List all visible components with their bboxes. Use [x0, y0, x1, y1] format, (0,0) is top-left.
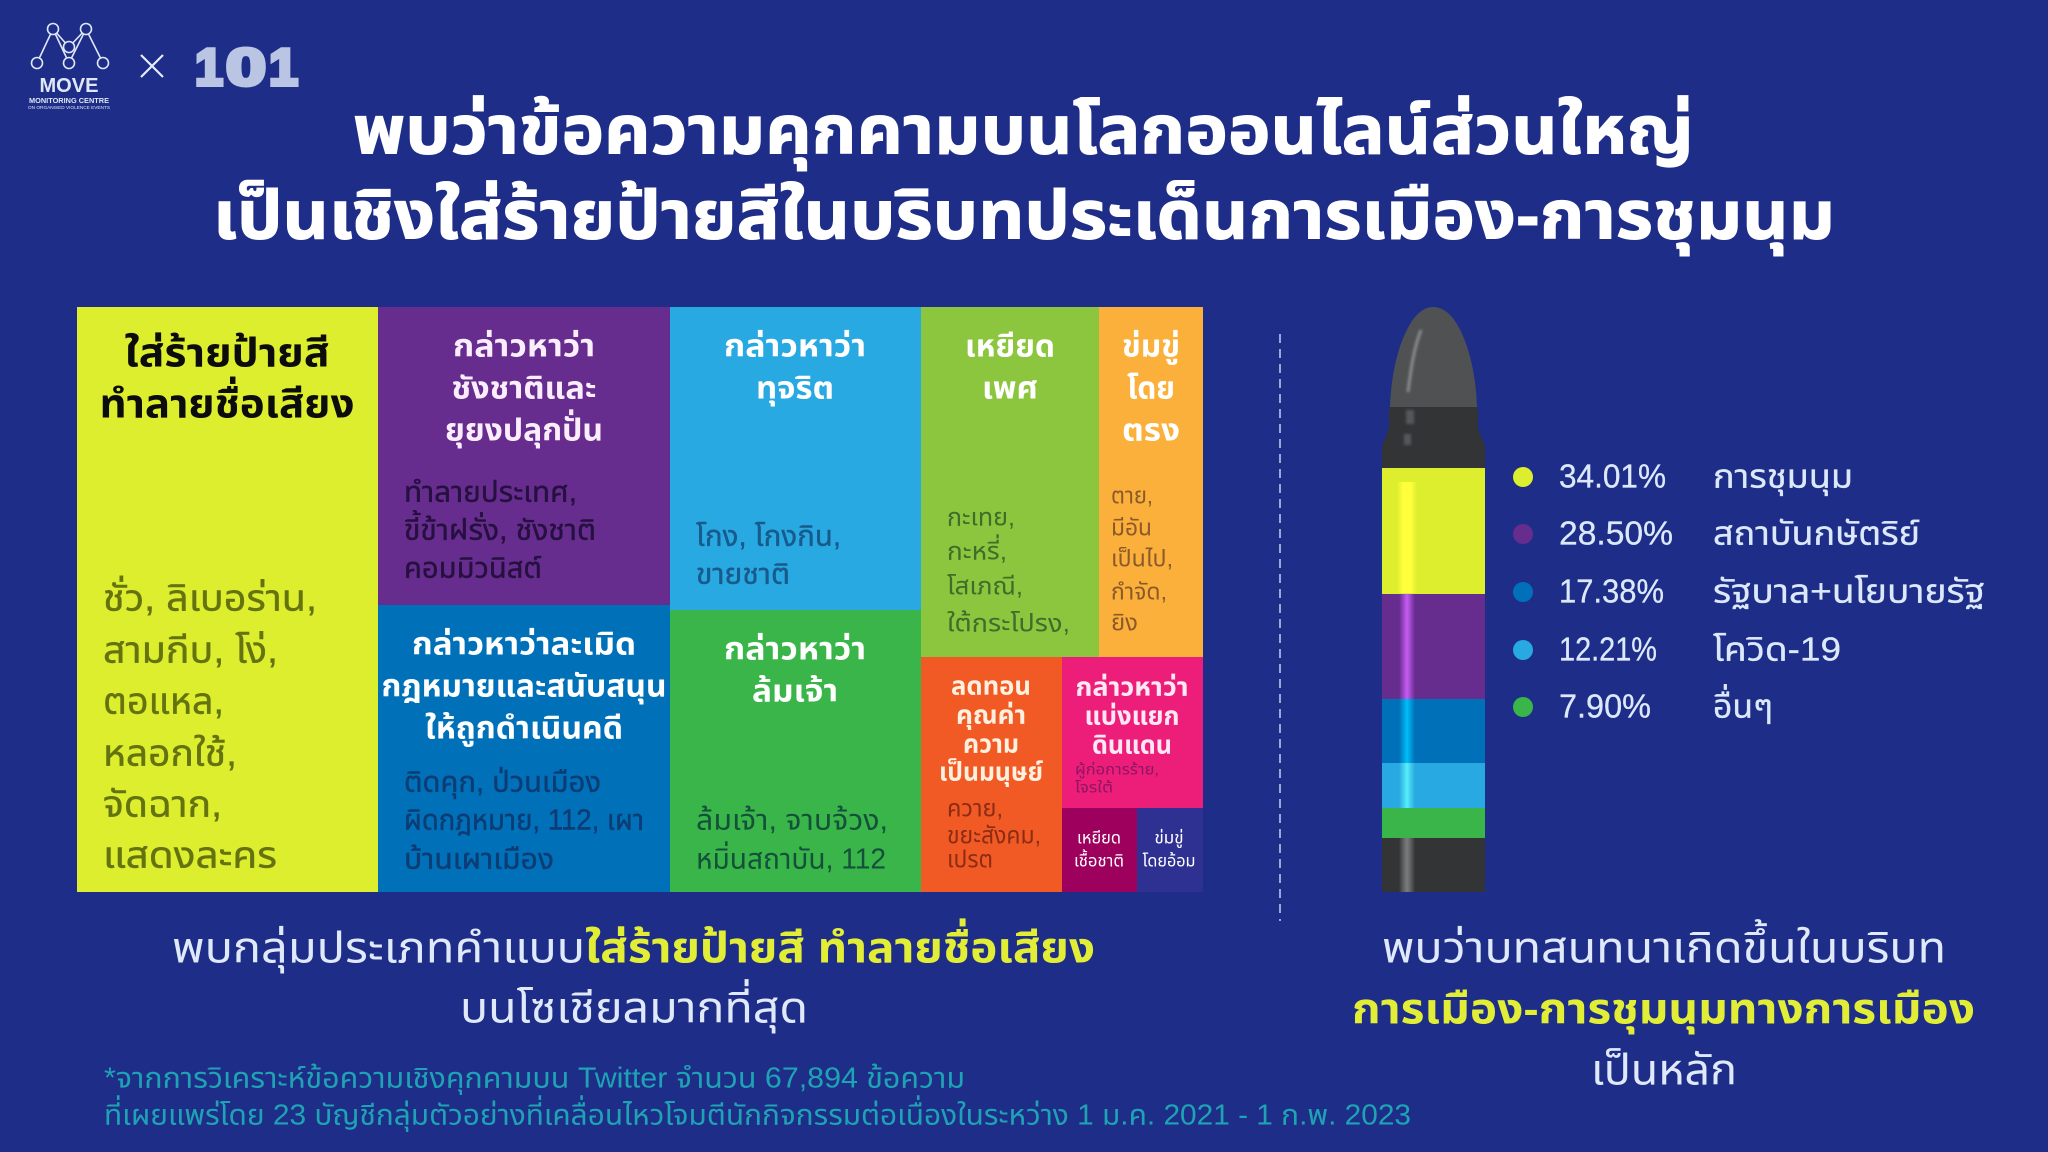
caption: treemap finding: บนโซเชียลมากที่สุด [460, 979, 808, 1034]
panel: accused of breaking law: ผิดกฎหมาย, 112, เผา [404, 805, 644, 837]
dashed divider [1279, 334, 1281, 921]
legend item: government: รัฐบาล+นโยบายรัฐ [1713, 573, 1985, 610]
panel: accused of corruption: ทุจริต [756, 371, 834, 407]
panel: sexual harassment: ใต้กระโปรง, [947, 610, 1070, 638]
legend item: government: 17.38% [1559, 573, 1664, 610]
logo: 101 [195, 39, 298, 97]
icon: times sign [141, 55, 163, 77]
title: เป็นเชิงใส่ร้ายป้ายสีในบริบทประเด็นการเมือง-การชุมนุม [213, 178, 1835, 257]
legend item: monarchy [1513, 515, 1920, 552]
panel: direct threats: ตรง [1122, 413, 1180, 448]
panel: accused of anti-monarchy: หมิ่นสถาบัน, 112 [696, 840, 886, 876]
panel: accused of hating nation: คอมมิวนิสต์ [404, 553, 542, 585]
panel: separatism: แบ่งแยก [1084, 701, 1180, 731]
title: พบว่าข้อความคุกคามบนโลกออนไลน์ส่วนใหญ่ [353, 93, 1694, 172]
panel: indirect threats: โดยอ้อม [1142, 851, 1196, 871]
legend item: covid: โควิด-19 [1713, 631, 1841, 668]
panel: indirect threats: ข่มขู่ [1154, 829, 1184, 850]
panel: accused of corruption [670, 307, 921, 610]
panel: direct threats: ยิง [1111, 610, 1138, 636]
panel: direct threats: เป็นไป, [1111, 546, 1173, 572]
logo: 101: 1 [195, 39, 223, 97]
panel: dehumanizing [921, 657, 1062, 892]
legend [1513, 458, 1985, 725]
panel: indirect threats [1137, 808, 1203, 892]
panel: accused of hating nation [378, 307, 670, 605]
panel: sexual harassment [921, 307, 1099, 657]
panel: defame and damage reputation [77, 307, 378, 892]
legend item: covid: 12.21% [1559, 631, 1657, 668]
panel: accused of hating nation: ยุยงปลุกปั่น [445, 409, 603, 449]
footnote [104, 1063, 1411, 1132]
panel: separatism: ดินแดน [1092, 730, 1172, 760]
caption: treemap finding: พบกลุ่มประเภทคำแบบ [172, 925, 585, 974]
panel: separatism: กล่าวหาว่า [1076, 672, 1188, 702]
panel: accused of breaking law: บ้านเผาเมือง [404, 844, 554, 876]
panel: accused of anti-monarchy: ล้มเจ้า, จาบจ้วง, [696, 805, 888, 837]
panel: sexual harassment: เหยียด [965, 329, 1055, 364]
footnote: ที่เผยแพร่โดย 23 บัญชีกลุ่มตัวอย่างที่เคลื่อนไหวโจมตีนักกิจกรรมต่อเนื่องในระหว่าง 1 ม.ค. 2021 - 1 ก.พ. 2023 [104, 1095, 1411, 1132]
panel: defame and damage reputation: จัดฉาก, [103, 784, 222, 825]
panel: defame and damage reputation: ชั่ว, ลิเบอร่าน, [103, 575, 317, 619]
panel: defame and damage reputation: สามกีบ, โง่, [103, 630, 278, 671]
panel: direct threats: มีอัน [1111, 515, 1152, 541]
caption: context finding: พบว่าบทสนทนาเกิดขึ้นในบริบท [1382, 919, 1946, 973]
panel: direct threats: โดย [1127, 371, 1175, 406]
panel: accused of hating nation: ขี้ข้าฝรั่ง, ชังชาติ [404, 510, 596, 547]
legend item: protests [1513, 458, 1853, 497]
logo: 101: 1 [269, 39, 298, 97]
legend item: other [1513, 684, 1773, 725]
panel: direct threats: ข่มขู่ [1122, 329, 1180, 365]
panel: racial contempt: เชื้อชาติ [1074, 849, 1124, 871]
panel: accused of corruption: กล่าวหาว่า [724, 329, 866, 364]
panel: accused of hating nation: ชังชาติและ [452, 371, 596, 406]
panel: accused of breaking law: ติดคุก, ป่วนเมือง [404, 767, 601, 799]
legend item: monarchy: สถาบันกษัตริย์ [1713, 515, 1920, 552]
panel: dehumanizing: ควาย, [947, 796, 1003, 823]
treemap of threat message categories [77, 307, 1203, 892]
panel: dehumanizing: เปรต [947, 847, 993, 874]
panel: accused of breaking law [378, 605, 670, 892]
panel: accused of breaking law: กล่าวหาว่าละเมิด [412, 627, 636, 662]
panel: accused of anti-monarchy: ล้มเจ้า [752, 674, 838, 709]
logo: MOVE Monitoring Centre: ON ORGANISED VIOLENCE EVENTS [28, 105, 110, 110]
caption: context finding: การเมือง-การชุมนุมทางการเมือง [1352, 986, 1975, 1035]
panel: direct threats: ตาย, [1111, 483, 1153, 509]
panel: accused of breaking law: กฎหมายและสนับสนุน [382, 669, 666, 705]
panel: direct threats [1099, 307, 1203, 657]
panel: dehumanizing: เป็นมนุษย์ [939, 757, 1043, 788]
legend item: covid [1513, 631, 1841, 668]
logo: MOVE Monitoring Centre: MOVE [40, 75, 98, 97]
panel: accused of breaking law: ให้ถูกดำเนินคดี [425, 711, 623, 747]
legend item: other: อื่นๆ [1713, 684, 1773, 725]
legend item: monarchy: 28.50% [1559, 515, 1673, 552]
panel: defame and damage reputation: หลอกใช้, [103, 733, 237, 774]
panel: sexual harassment: กะเทย, [947, 504, 1015, 532]
panel: defame and damage reputation: แสดงละคร [103, 835, 277, 876]
panel: separatism [1062, 657, 1203, 808]
caption: context finding: เป็นหลัก [1591, 1047, 1737, 1095]
title [213, 93, 1835, 257]
panel: accused of corruption: ขายชาติ [696, 559, 790, 591]
footnote: *จากการวิเคราะห์ข้อความเชิงคุกคามบน Twitter จำนวน 67,894 ข้อความ [104, 1063, 965, 1095]
panel: accused of hating nation: ทำลายประเทศ, [404, 477, 577, 509]
caption: treemap finding: ใส่ร้ายป้ายสี ทำลายชื่อเสียง [585, 918, 1095, 973]
legend item: protests: การชุมนุม [1713, 458, 1853, 497]
panel: dehumanizing: ความ [963, 729, 1019, 759]
panel: direct threats: กำจัด, [1111, 579, 1167, 605]
panel: separatism: ผู้ก่อการร้าย, [1075, 761, 1159, 779]
legend item: protests: 34.01% [1559, 458, 1666, 495]
panel: defame and damage reputation: ตอแหล, [103, 681, 224, 722]
panel: dehumanizing: ลดทอน [951, 671, 1031, 701]
panel: accused of hating nation: กล่าวหาว่า [453, 329, 595, 364]
panel: dehumanizing: ขยะสังคม, [947, 823, 1041, 850]
chart: bullet stacked bar [1382, 307, 1485, 892]
panel: accused of anti-monarchy [670, 610, 921, 892]
panel: accused of anti-monarchy: กล่าวหาว่า [724, 632, 866, 667]
legend item: government [1513, 573, 1985, 610]
panel: defame and damage reputation: ใส่ร้ายป้ายสี [124, 331, 330, 376]
panel: separatism: โจรใต้ [1075, 780, 1113, 797]
panel: accused of corruption: โกง, โกงกิน, [696, 521, 841, 553]
logo: MOVE Monitoring Centre [28, 24, 110, 110]
panel: sexual harassment: กะหรี่, [947, 534, 1007, 566]
panel: dehumanizing: คุณค่า [956, 700, 1026, 731]
legend item: other: 7.90% [1559, 688, 1651, 725]
caption: context finding [1352, 919, 1975, 1095]
panel: defame and damage reputation: ทำลายชื่อเสียง [100, 376, 354, 427]
caption: treemap finding [172, 918, 1095, 1034]
logo: 101: 0 [226, 39, 266, 97]
panel: racial contempt [1062, 808, 1137, 892]
panel: sexual harassment: โสเภณี, [947, 573, 1023, 601]
panel: sexual harassment: เพศ [982, 371, 1038, 406]
panel: racial contempt: เหยียด [1077, 829, 1121, 848]
logo: MOVE Monitoring Centre: MONITORING CENTRE [29, 96, 109, 105]
